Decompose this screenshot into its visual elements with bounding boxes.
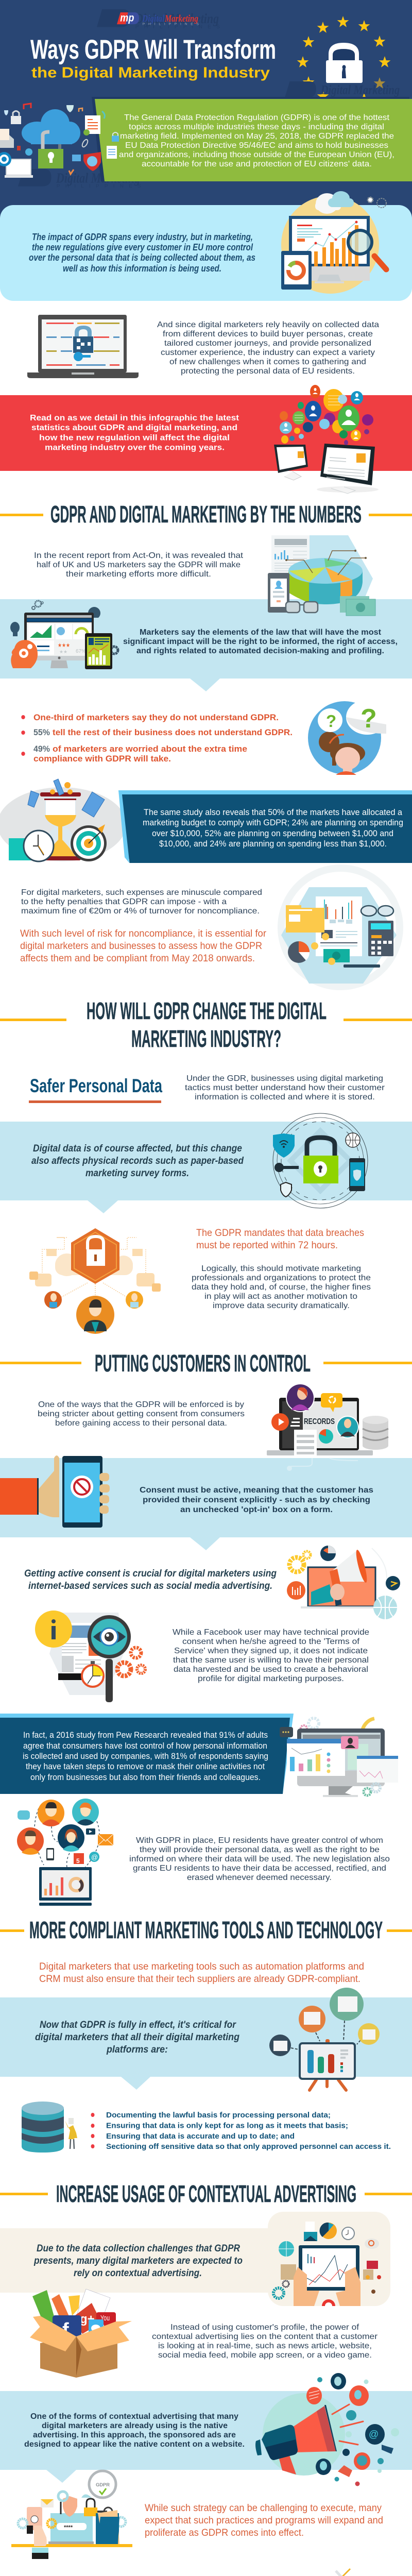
illustration: GDPR compliant shield	[262, 2569, 387, 2576]
icon: cloud security cluster	[0, 104, 119, 178]
text: read on: how the new regulation will affect the digital	[39, 434, 230, 442]
icon: EU stars and padlock	[297, 16, 390, 104]
text: intro paragraph: and organizations, including those outside of the European Union (EU),	[119, 150, 394, 159]
text: data collection challenges: rely on contextual advertising.	[74, 2268, 202, 2279]
text: intro paragraph: marketing field. Implemented on May 25, 2018, the GDPR replaced the	[120, 132, 394, 141]
text: Pew Research: agree that consumers have lost control of how personal information	[23, 1741, 267, 1751]
text: elements of the law: significant impact will be the right to be informed, the right of access,	[123, 637, 398, 646]
text: intro paragraph: EU Data Protection Directive 95/46/EC and aims to hold businesses	[125, 141, 388, 150]
text: active consent crucial: internet-based services such as social media advertising.	[28, 1581, 272, 1591]
text: logically: in play will act as another motivation to	[204, 1292, 357, 1301]
illustration: dashboard monitor with head and tablet: 67%	[76, 649, 86, 654]
illustration: connected people and laptop: 5	[76, 1857, 80, 1865]
text: read on: Read on as we detail in this infographic the latest	[30, 414, 239, 422]
text: enforced by consent	[38, 1400, 245, 1428]
text: intro paragraph	[119, 113, 394, 168]
panel: GDPR intro	[92, 97, 412, 181]
illustration: box of social media icons: You	[100, 2314, 110, 2323]
text: elements of the law	[123, 628, 398, 655]
text: consent must be active: an unchecked 'opt-in' box on a form.	[180, 1505, 333, 1514]
illustration: confused woman with question marks	[308, 700, 388, 775]
text: Act-On report: In the recent report from Act-On, it was revealed that	[34, 551, 244, 560]
illustration: megaphone with message bubbles	[255, 2373, 399, 2486]
text: data breaches 72 hours	[196, 1227, 364, 1251]
icon: database with person	[22, 2102, 77, 2153]
list: platform checklist: Sectioning off sensitive data so that only approved personnel can access it.	[106, 2142, 391, 2151]
illustration: dashboard monitor with head and tablet: ★★	[59, 649, 67, 654]
text: such strategy	[145, 2502, 383, 2538]
logo: header Digital Marketing Philippines	[117, 12, 199, 26]
text: elements of the law: Marketers say the elements of the law that will have the most	[140, 628, 382, 637]
watermark logo top	[97, 9, 220, 30]
text: Facebook terms: profile for digital marketing purposes.	[198, 1674, 344, 1683]
text: Pew Research	[23, 1730, 268, 1782]
text: hefty penalties: For digital marketers, such expenses are minuscule compared	[21, 888, 262, 897]
text: native advertising	[24, 2412, 245, 2449]
panel: consent band	[0, 1458, 412, 1550]
text: intro paragraph: The General Data Protection Regulation (GDPR) is one of the hottest	[124, 113, 390, 122]
illustration: analytics windows on monitor	[280, 1718, 398, 1797]
illustration: pie chart report	[268, 535, 375, 616]
text: native advertising: digital marketers are already using is the native	[42, 2421, 228, 2430]
text: Facebook terms: data harvested and be used to create a behavioral	[174, 1665, 368, 1674]
text: such strategy: expect that such practices and programs will expand and	[145, 2515, 383, 2526]
text: impact statement: over the personal data that is being collected about them, as	[29, 252, 255, 263]
text: Act-On report: half of UK and US marketers say the GDPR will make	[37, 561, 241, 569]
text: fully in effect: Now that GDPR is fully in effect, it's critical for	[40, 2020, 236, 2030]
text: digital marketers rely on data: from different devices to build buyer personas, create	[163, 330, 373, 338]
text: hefty penalties: maximum fine of €20m or 4% of turnover for noncompliance.	[21, 907, 260, 916]
illustration: GDPR ready seal with locks and devices: ****	[64, 2524, 73, 2531]
text: under the GDR: information is collected and where it is stored.	[195, 1093, 375, 1101]
text: risk of noncompliance: affects them and be compliant from May 2018 onwards.	[20, 953, 255, 964]
text: Facebook terms	[173, 1628, 369, 1683]
text: data collection challenges: presents, many digital marketers are expected to	[33, 2256, 243, 2266]
text: Facebook terms: While a Facebook user may have technical provide	[173, 1628, 369, 1637]
illustration: box of social media icons: g+	[80, 2312, 95, 2326]
list: marketer statistics: compliance with GDPR will take.	[33, 754, 171, 764]
text: read on: marketing industry over the coming years.	[45, 443, 225, 452]
label: records: RECORDS	[304, 1417, 335, 1426]
text: budget study: over $10,000, 52% are planning on spending between $1,000 and	[152, 828, 393, 838]
text: data collection challenges: Due to the data collection challenges that GDPR	[37, 2243, 240, 2254]
text: Pew Research: only from businesses but also from their friends and colleagues.	[30, 1772, 261, 1782]
text: hefty penalties	[21, 888, 262, 916]
panel: elements of the law band	[0, 599, 412, 691]
text: digital marketers rely on data: tailored customer journeys, and provide personalized	[164, 339, 371, 348]
text: data breaches 72 hours: The GDPR mandates that data breaches	[196, 1227, 364, 1239]
illustration: analytics monitor and tablet	[281, 191, 386, 294]
text: consent must be active	[140, 1486, 373, 1514]
text: elements of the law: and rights related to automated decision-making and profiling.	[136, 647, 384, 655]
logo: header Digital Marketing Philippines: PHILIPPINES	[143, 23, 199, 26]
list: platform checklist	[91, 2111, 391, 2151]
text: EU residents control	[129, 1836, 390, 1882]
text: digital marketers rely on data: of new challenges when it comes to gathering and	[169, 358, 366, 366]
text: risk of noncompliance: With such level of risk for noncompliance, it is essential for	[20, 928, 266, 939]
watermark logo left: Digital Marketing	[56, 171, 140, 186]
watermark logo top: PHILIPPINES	[135, 24, 220, 30]
text: risk of noncompliance: digital marketers and businesses to assess how the GDPR	[20, 940, 262, 952]
text: contextual advertising explained	[152, 2323, 378, 2360]
list: marketer statistics: of marketers are worried about the extra time	[53, 744, 247, 754]
text: active consent crucial	[24, 1568, 277, 1591]
illustration: protected data house with people	[29, 1228, 161, 1334]
watermark logo left	[18, 169, 141, 189]
title: Ways GDPR Will Transform	[30, 35, 276, 65]
text: read on	[30, 414, 239, 452]
text: fully in effect: digital marketers that all their digital marketing	[35, 2032, 239, 2043]
text: intro paragraph: accountable for the use and protection of EU citizens' data.	[142, 160, 372, 168]
text: digital marketers rely on data: customer experience, the industry can expect a variety	[161, 348, 375, 357]
text: EU residents control: With GDPR in place, EU residents have greater control of whom	[136, 1836, 383, 1845]
text: fully in effect	[35, 2020, 239, 2055]
text: impact statement	[29, 232, 255, 274]
illustration: megaphone on laptop	[287, 1546, 400, 1619]
panel: native advertising band	[0, 2391, 412, 2483]
watermark logo middle right	[285, 81, 400, 98]
text: impact statement: The impact of GDPR spans every industry, but in marketing,	[32, 232, 253, 242]
text: consent must be active: provided their consent explicitly - such as by checking	[143, 1496, 370, 1504]
text: contextual advertising explained: social media feed, mobile app screen, or a video game.	[158, 2351, 372, 2360]
illustration: confused woman with question marks: ?	[360, 704, 377, 734]
list: marketer statistics: 49%	[33, 744, 50, 754]
text: enforced by consent: being stricter about getting consent from consumers	[38, 1410, 245, 1418]
text: EU residents control: they will provide their personal data, as well as the right to be	[140, 1845, 380, 1854]
illustration: presentation board and tool icons	[269, 1988, 380, 2090]
illustration: confused woman with question marks: ?	[326, 711, 336, 731]
text: Facebook terms: Service' when they signed up, it does not indicate	[174, 1647, 368, 1655]
text: Act-On report	[34, 551, 244, 579]
text: active consent crucial: Getting active consent is crucial for digital marketers using	[24, 1568, 277, 1579]
text: logically: improve data security dramatically.	[213, 1301, 350, 1310]
text: hefty penalties: to the hefty penalties that GDPR can impose - with a	[21, 897, 227, 906]
illustration: box of social media icons: f	[62, 2319, 69, 2341]
text: Act-On report: their marketing efforts more difficult.	[66, 570, 211, 579]
text: risk of noncompliance	[20, 928, 266, 964]
text: budget study: $10,000, and 24% are planning on spending less than $1,000.	[159, 839, 387, 849]
text: Facebook terms: consent when he/she agreed to the 'Terms of	[182, 1637, 360, 1646]
text: digital marketers rely on data: protecting the personal data of EU residents.	[181, 367, 355, 376]
list: marketer statistics: 55%	[33, 728, 50, 737]
text: intro paragraph: topics across multiple industries these days - including the digital	[129, 123, 384, 131]
text: enforced by consent: One of the ways that the GDPR will be enforced is by	[38, 1400, 244, 1409]
text: read on: statistics about GDPR and digital marketing, and	[31, 423, 237, 432]
text: contextual advertising explained: Instead of using customer's profile, the power of	[170, 2323, 359, 2332]
text: consent must be active: Consent must be active, meaning that the customer has	[140, 1486, 373, 1495]
logo: header Digital Marketing Philippines: Digital	[142, 13, 165, 24]
text: fully in effect: platforms are:	[106, 2044, 168, 2055]
text: Facebook terms: that the same user is willing to have their personal	[173, 1656, 369, 1665]
text: Pew Research: they have taken steps to remove or mask their online activities not	[26, 1761, 265, 1771]
text: EU residents control: erased whenever deemed necessary.	[187, 1873, 332, 1882]
text: native advertising: designed to appear like the native content on a website.	[24, 2440, 245, 2449]
text: logically: data they hold and, of course, the higher fines	[192, 1283, 371, 1292]
logo: header Digital Marketing Philippines: Marketing	[164, 13, 198, 24]
icon: padlock with security ring	[273, 1113, 368, 1208]
list: platform checklist: Ensuring that data is only kept for as long as it meets that basis;	[106, 2122, 348, 2130]
panel: read on banner	[0, 395, 412, 471]
text: EU residents control: grants EU residents to have their data be accessed, rectified, and	[133, 1864, 386, 1873]
list: platform checklist: Ensuring that data is accurate and up to date; and	[106, 2132, 295, 2141]
illustration: box of social media icons	[30, 2289, 132, 2378]
text: EU residents control: informed on where their data will be used. The new legislation also	[129, 1855, 390, 1863]
illustration: connected people and laptop	[17, 1799, 113, 1906]
illustration: dashboard monitor with head and tablet	[10, 601, 118, 669]
list: platform checklist: Documenting the lawful basis for processing personal data;	[106, 2111, 331, 2120]
text: digital marketers rely on data	[157, 320, 379, 376]
text: native advertising: One of the forms of contextual advertising that many	[30, 2412, 238, 2421]
logo: header Digital Marketing Philippines: mp	[120, 12, 134, 24]
text: data breaches 72 hours: must be reported within 72 hours.	[196, 1240, 338, 1251]
text: logically	[192, 1264, 371, 1310]
subheading: safer personal data: Safer Personal Data	[30, 1075, 162, 1096]
text: Pew Research: In fact, a 2016 study from Pew Research revealed that 91% of adults	[23, 1730, 268, 1740]
text: budget study	[143, 807, 403, 849]
text: tech suppliers	[39, 1961, 364, 1985]
text: budget study: The same study also reveals that 50% of the markets have allocated a	[144, 807, 403, 817]
text: digital data: marketing survey forms.	[85, 1168, 189, 1179]
watermark logo top: Digital Marketing	[134, 11, 219, 27]
icon: laptop with padlock and key	[27, 315, 139, 378]
list: marketer statistics	[21, 713, 293, 764]
illustration: finance report hexagon	[281, 868, 400, 987]
panel: data collection beige	[0, 2212, 390, 2306]
illustration: dashboard monitor with head and tablet: ★★★	[58, 642, 70, 649]
text: digital marketers rely on data: And since digital marketers rely heavily on collected data	[157, 320, 379, 329]
subtitle: the Digital Marketing Industry	[31, 65, 270, 81]
illustration: box of social media icons: be	[103, 2324, 110, 2331]
illustration: tablet in hands with marketing icons	[273, 2222, 381, 2306]
panel: platforms band	[0, 1997, 412, 2090]
list: marketer statistics: tell the rest of their business does not understand GDPR.	[53, 728, 293, 737]
text: enforced by consent: before gaining access to their personal data.	[55, 1419, 227, 1428]
list: marketer statistics: One-third of marketers say they do not understand GDPR.	[33, 713, 279, 722]
text: logically: Logically, this should motivate marketing	[201, 1264, 361, 1273]
illustration: connected people and laptop: @	[91, 1853, 98, 1861]
illustration: hourglass, clock, target over world map	[0, 779, 126, 861]
text: under the GDR: tactics must better understand how their customer	[185, 1083, 385, 1092]
heading: how will GDPR change: MARKETING INDUSTRY?	[131, 1025, 281, 1052]
text: such strategy: While such strategy can be challenging to execute, many	[145, 2502, 382, 2514]
text: logically: professionals and organizations to protect the	[192, 1274, 371, 1282]
panel: Pew Research study	[0, 1714, 294, 1794]
heading: how will GDPR change	[0, 997, 412, 1052]
text: native advertising: advertising. In this approach, the sponsored ads are	[33, 2431, 236, 2439]
text: digital data: Digital data is of course affected, but this change	[33, 1143, 242, 1154]
text: such strategy: proliferate as GDPR comes into effect.	[145, 2527, 304, 2538]
illustration: megaphone with message bubbles: @	[369, 2429, 379, 2440]
subheading: safer personal data	[29, 1075, 162, 1103]
text: impact statement: the new regulations give every customer in EU more control	[32, 242, 253, 252]
watermark logo left: PHILIPPINES	[57, 183, 141, 189]
panel: digital data band	[0, 1122, 412, 1213]
text: Pew Research: is collected and used by companies, with 81% of respondents saying	[23, 1751, 268, 1761]
text: under the GDR: Under the GDR, businesses using digital marketing	[186, 1074, 383, 1083]
illustration: GDPR ready seal with locks and devices: GDPR	[96, 2482, 110, 2488]
text: contextual advertising explained: contextual advertising lies on the content that a customer	[152, 2332, 378, 2341]
text: impact statement: well as how this information is being used.	[63, 263, 221, 274]
illustration: hand holding phone with no sign	[0, 1455, 110, 1528]
text: contextual advertising explained: is looking at in real-time, such as news article, website,	[158, 2342, 372, 2350]
panel: budget study	[118, 790, 412, 863]
illustration: magnifier with eye and stopwatch	[35, 1611, 145, 1702]
text: under the GDR	[185, 1074, 385, 1101]
title	[30, 35, 276, 81]
text: digital data: also affects physical records such as paper-based	[31, 1156, 244, 1166]
text: digital data	[31, 1143, 244, 1179]
text: tech suppliers: Digital marketers that use marketing tools such as automation platforms and	[39, 1961, 364, 1972]
text: data collection challenges	[33, 2243, 243, 2279]
illustration: monitors with social bubbles	[274, 385, 379, 494]
illustration: records laptop with people and database	[267, 1383, 388, 1471]
text: tech suppliers: CRM must also ensure that their tech suppliers are already GDPR-compliant.	[39, 1973, 360, 1985]
panel: impact of GDPR	[0, 205, 412, 301]
panel: header background	[0, 0, 412, 222]
text: budget study: marketing budget to comply with GDPR; 24% are planning on spending	[143, 818, 403, 827]
illustration: GDPR ready seal with locks and devices	[11, 2471, 132, 2559]
